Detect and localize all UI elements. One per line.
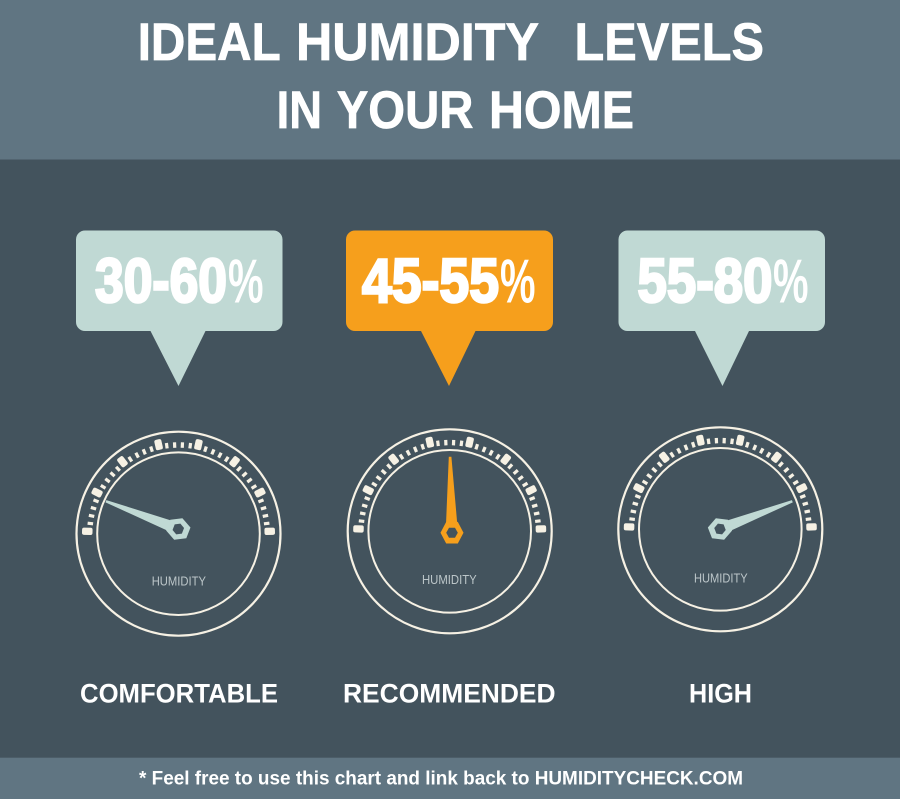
- title: YOUR: [337, 81, 474, 140]
- callout: recommended range: [346, 230, 553, 386]
- title: IN: [277, 81, 322, 140]
- needle: recommended: [440, 457, 464, 544]
- title: LEVELS: [574, 13, 764, 72]
- title: HOME: [489, 81, 634, 140]
- label: high: HIGH: [689, 678, 752, 708]
- gauge label: HUMIDITY: [422, 573, 477, 587]
- footer note: * Feel free to use this chart and link back to HUMIDITYCHECK.COM: [139, 768, 743, 790]
- title: [138, 13, 764, 140]
- label: comfortable: COMFORTABLE: [80, 678, 278, 708]
- title: IDEAL: [138, 13, 281, 72]
- label: recommended: RECOMMENDED: [343, 678, 556, 708]
- callout: recommended range: %: [500, 248, 536, 316]
- callout: high range: [618, 230, 825, 386]
- gauge label: HUMIDITY: [694, 571, 748, 585]
- footer band: [0, 758, 900, 799]
- title: HUMIDITY: [296, 13, 539, 72]
- callout: high range: %: [773, 248, 808, 316]
- gauge: recommended: [348, 429, 552, 633]
- header band: [0, 0, 900, 160]
- callout: comfortable range: %: [228, 248, 264, 316]
- gauge label: HUMIDITY: [152, 575, 207, 589]
- callout: recommended range: 45-55: [362, 247, 499, 316]
- callout: comfortable range: [76, 230, 282, 386]
- callout: high range: 55-80: [638, 247, 772, 316]
- needle: comfortable: [102, 490, 193, 544]
- gauge: high: [618, 427, 822, 631]
- callout: comfortable range: 30-60: [95, 247, 227, 316]
- needle: high: [706, 490, 796, 544]
- gauge: comfortable: [76, 432, 280, 636]
